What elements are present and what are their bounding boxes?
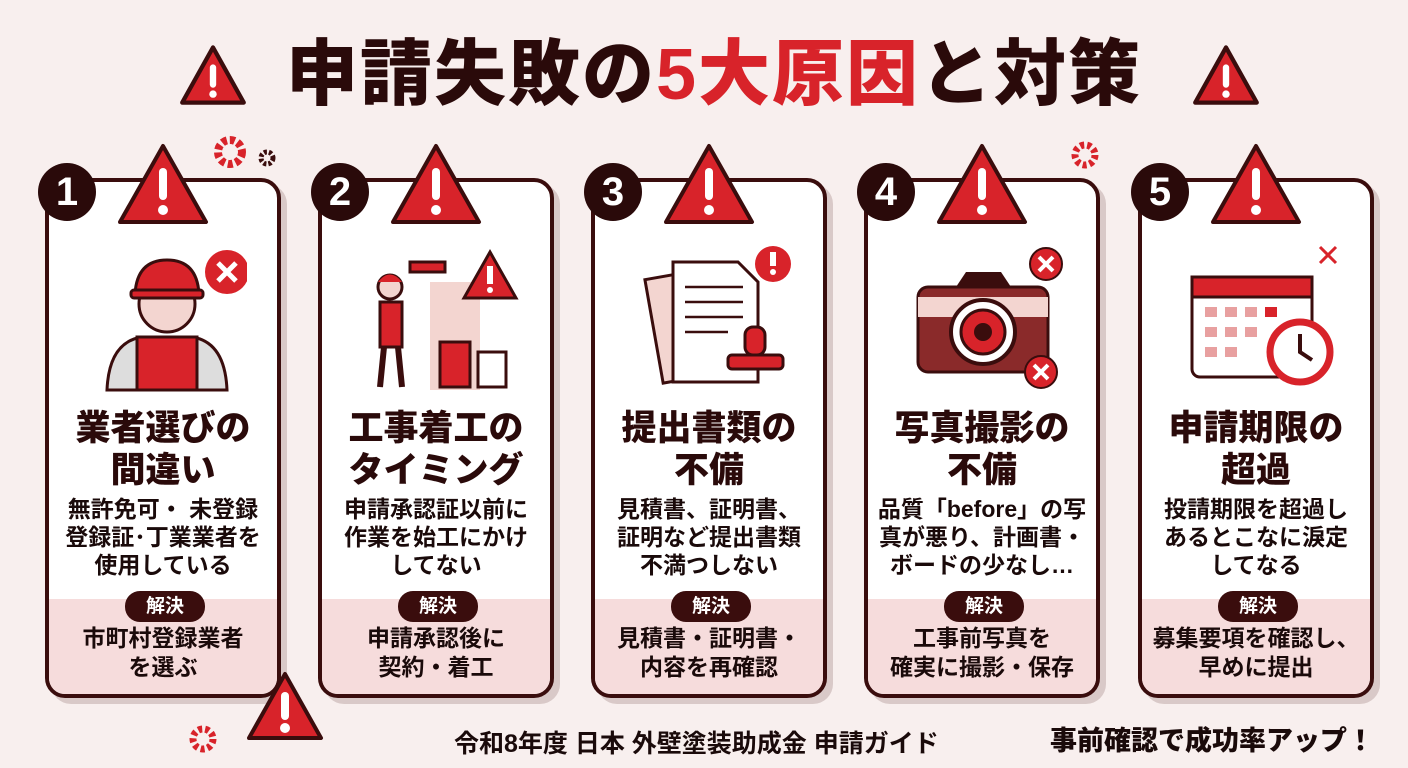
panel: card 5 bbox=[1138, 178, 1374, 698]
icon: title warning left bbox=[180, 45, 246, 105]
number badge 5 bbox=[1131, 163, 1189, 221]
pill bbox=[125, 591, 205, 622]
text: cause: あるとこなに淚定 bbox=[1164, 524, 1348, 550]
solution area bbox=[1142, 599, 1370, 694]
icon: gear right bbox=[1072, 142, 1098, 168]
text: solution bbox=[367, 625, 505, 680]
text: cause: 無許免可・ 未登録 bbox=[68, 496, 258, 522]
solution area bbox=[868, 599, 1096, 694]
panel: card 4 bbox=[864, 178, 1100, 698]
heading bbox=[1168, 409, 1344, 490]
pill: 解決 bbox=[1239, 596, 1277, 617]
heading: タイミング bbox=[348, 451, 524, 490]
text: cause: してなる bbox=[1210, 552, 1302, 578]
icon: title warning right bbox=[1193, 45, 1259, 105]
number badge 3: 3 bbox=[602, 170, 624, 214]
pill: 解決 bbox=[692, 596, 730, 617]
pill bbox=[671, 591, 751, 622]
number badge 3 bbox=[584, 163, 642, 221]
icon: worker bbox=[105, 250, 247, 392]
heading: 提出書類の bbox=[621, 409, 796, 448]
text: cause: 作業を始工にかけ bbox=[344, 524, 528, 550]
pill: 解決 bbox=[419, 596, 457, 617]
icon: gear bottom bbox=[190, 726, 216, 752]
heading: 写真撮影の bbox=[894, 409, 1070, 448]
icon: bottom warning bbox=[247, 672, 324, 740]
text: solution: 内容を再確認 bbox=[640, 654, 778, 680]
text: cause: 使用している bbox=[94, 552, 232, 578]
number badge 4: 4 bbox=[875, 170, 897, 214]
text: cause: 真が悪り、計画書・ bbox=[879, 524, 1085, 550]
text: cause bbox=[878, 496, 1086, 578]
text: cause: 不満つしない bbox=[640, 552, 778, 578]
text: cause: 登録証･丁業業者を bbox=[65, 524, 261, 550]
text: solution: 工事前写真を bbox=[913, 625, 1051, 651]
icon: card warnings bbox=[118, 144, 1302, 224]
text: solution bbox=[82, 625, 244, 680]
text: cause: 見積書、証明書、 bbox=[617, 496, 801, 522]
panel: card 2 bbox=[318, 178, 554, 698]
text: solution: 契約・着工 bbox=[378, 654, 494, 680]
text: solution: 申請承認後に bbox=[367, 625, 505, 651]
panel: card 1 bbox=[45, 178, 281, 698]
pill bbox=[1218, 591, 1298, 622]
pill bbox=[944, 591, 1024, 622]
heading: 業者選びの bbox=[75, 409, 250, 448]
text: solution bbox=[1152, 625, 1360, 680]
text: cause: 申請承認証以前に bbox=[344, 496, 528, 522]
heading: 超過 bbox=[1221, 451, 1291, 490]
number badge 5: 5 bbox=[1149, 170, 1171, 214]
footer: guide title: 令和8年度 日本 外壁塗装助成金 申請ガイド bbox=[454, 730, 939, 758]
text: solution: を選ぶ bbox=[128, 654, 198, 680]
number badge 4 bbox=[857, 163, 915, 221]
heading: 不備 bbox=[674, 451, 744, 490]
number badge 2 bbox=[311, 163, 369, 221]
pill: 解決 bbox=[146, 596, 184, 617]
heading bbox=[621, 409, 796, 490]
heading bbox=[894, 409, 1070, 490]
text: cause bbox=[344, 496, 528, 578]
icon: painter bbox=[376, 249, 518, 390]
heading bbox=[348, 409, 524, 490]
number badge 1: 1 bbox=[56, 170, 78, 214]
text: solution bbox=[890, 625, 1074, 680]
text: cause bbox=[65, 496, 261, 578]
text: cause: 証明など提出書類 bbox=[617, 524, 801, 550]
icon: calendar bbox=[1190, 246, 1337, 386]
heading: 間違い bbox=[110, 451, 216, 490]
panel: card 3 bbox=[591, 178, 827, 698]
text: cause: 品質「before」の写 bbox=[878, 496, 1086, 522]
heading bbox=[75, 409, 250, 490]
solution area bbox=[322, 599, 550, 694]
solution area bbox=[595, 599, 823, 694]
text: solution: 市町村登録業者 bbox=[82, 625, 244, 651]
icon: documents bbox=[643, 246, 791, 385]
text: cause: ボードの少なし… bbox=[890, 552, 1074, 578]
text: cause: 投請期限を超過し bbox=[1164, 496, 1348, 522]
icon: camera bbox=[916, 247, 1063, 389]
pill: 解決 bbox=[965, 596, 1003, 617]
icon: gears bbox=[214, 136, 276, 168]
heading: 申請期限の bbox=[1168, 409, 1344, 448]
number badge 1 bbox=[38, 163, 96, 221]
text: cause: してない bbox=[390, 552, 482, 578]
text: solution: 見積書・証明書・ bbox=[617, 625, 801, 651]
title: 申請失敗の5大原因と対策 bbox=[286, 35, 1142, 115]
footer: tagline: 事前確認で成功率アップ！ bbox=[1050, 726, 1374, 756]
heading: 工事着工の bbox=[348, 409, 524, 448]
text: solution bbox=[617, 625, 801, 680]
text: cause bbox=[617, 496, 801, 578]
number badge 2: 2 bbox=[329, 170, 351, 214]
solution area bbox=[49, 599, 277, 694]
text: solution: 早めに提出 bbox=[1198, 654, 1314, 680]
heading: 不備 bbox=[947, 451, 1017, 490]
text: solution: 募集要項を確認し、 bbox=[1152, 625, 1360, 651]
pill bbox=[398, 591, 478, 622]
text: solution: 確実に撮影・保存 bbox=[890, 654, 1074, 680]
text: cause bbox=[1164, 496, 1348, 578]
